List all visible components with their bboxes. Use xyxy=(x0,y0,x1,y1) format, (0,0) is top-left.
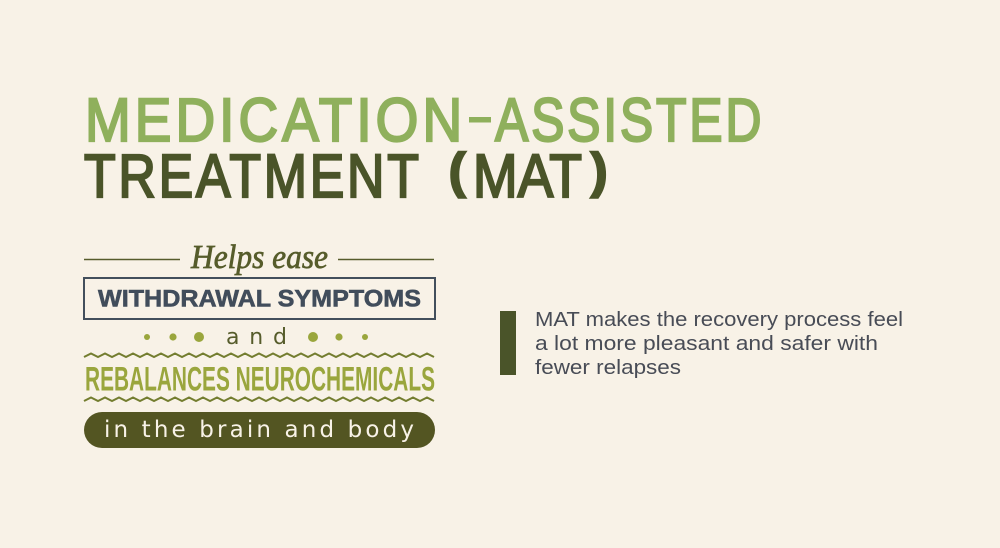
zigzag top xyxy=(84,354,434,357)
boxed label: withdrawal symptoms: WITHDRAWAL SYMPTOMS xyxy=(98,286,421,312)
heading: helps ease: Helps ease xyxy=(190,239,328,276)
pill label: in the brain and body: in the brain and body xyxy=(104,417,414,443)
label: rebalances neurochemicals: REBALANCES NEUROCHEMICALS xyxy=(85,360,435,398)
callout text xyxy=(535,309,903,379)
pill label: in the brain and body xyxy=(84,412,435,448)
zigzag bottom xyxy=(84,398,434,401)
title line 2: MAT xyxy=(473,142,582,210)
title line 2: TREATMENT xyxy=(84,142,419,210)
boxed label: withdrawal symptoms xyxy=(84,278,435,319)
callout text: a lot more pleasant and safer with xyxy=(535,333,878,355)
title line 1 xyxy=(85,87,762,155)
title line 2 xyxy=(84,142,607,210)
title line 2: ( xyxy=(449,144,466,198)
dotted divider with and xyxy=(144,325,368,350)
callout text: fewer relapses xyxy=(535,357,681,379)
title xyxy=(84,87,762,210)
accent bar xyxy=(500,311,516,375)
dotted divider with and: and xyxy=(226,325,287,350)
callout xyxy=(500,309,903,379)
title line 1: ASSISTED xyxy=(495,87,761,154)
callout text: MAT makes the recovery process feel xyxy=(535,309,903,331)
panel: lockup xyxy=(84,239,435,448)
title line 2: ) xyxy=(591,144,607,198)
title line 1: MEDICATION xyxy=(85,87,462,155)
